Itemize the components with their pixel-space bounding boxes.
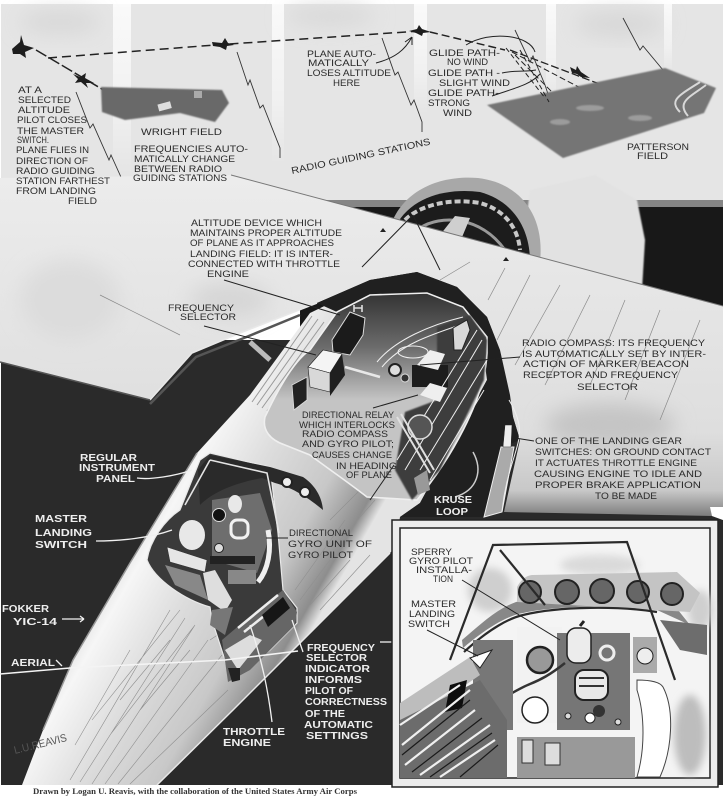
label: plane automatically loses altitude bbox=[307, 49, 391, 89]
altitude device box bbox=[332, 305, 365, 355]
engine cowling bbox=[392, 178, 541, 262]
label: Patterson Field bbox=[627, 142, 689, 162]
wiring shadow right bbox=[395, 315, 487, 500]
wires bbox=[377, 317, 487, 480]
pilot bbox=[165, 520, 233, 635]
label: frequency selector indicator: SELECTOR bbox=[306, 652, 367, 664]
label: regular instrument panel: INSTRUMENT bbox=[79, 462, 156, 474]
label: plane automatically loses altitude: HERE bbox=[333, 78, 360, 89]
label: at a selected altitude: PILOT CLOSES bbox=[17, 115, 87, 126]
label: Kruse loop bbox=[434, 494, 472, 518]
radio compass unit bbox=[389, 350, 448, 402]
cowl band bbox=[462, 596, 690, 648]
label: glide paths: GLIDE PATH- bbox=[428, 88, 499, 99]
label: frequencies automatically change: MATICALLY CHANGE bbox=[134, 154, 235, 165]
connecting rod bbox=[345, 367, 380, 377]
label: directional relay: IN HEADING bbox=[336, 461, 397, 472]
label: directional relay: AND GYRO PILOT; bbox=[302, 439, 394, 450]
label: at a selected altitude: SELECTED bbox=[18, 95, 71, 106]
label: regular instrument panel: REGULAR bbox=[80, 452, 137, 464]
label: plane automatically loses altitude: MATICALLY bbox=[308, 58, 370, 69]
label: glide paths: STRONG bbox=[428, 98, 470, 109]
inset label: master landing switch: LANDING bbox=[409, 609, 455, 620]
label: at a selected altitude: FROM LANDING bbox=[16, 186, 96, 197]
label: landing gear switches: PROPER BRAKE APPLICATION bbox=[535, 480, 701, 491]
label: glide paths: GLIDE PATH - bbox=[428, 68, 500, 79]
leader lines bbox=[204, 215, 534, 538]
label: at a selected altitude: FIELD bbox=[68, 196, 97, 207]
label: frequency selector indicator: SETTINGS bbox=[306, 730, 368, 742]
label: aerial: AERIAL bbox=[11, 657, 56, 669]
wing strut behind hatch bbox=[250, 342, 270, 360]
label: radio guiding stations: RADIO GUIDING STATIONS bbox=[290, 137, 432, 177]
label: throttle engine bbox=[223, 726, 285, 749]
dark background below wing bbox=[1, 340, 723, 785]
inset label: master landing switch: SWITCH bbox=[408, 619, 450, 630]
label: landing gear switches bbox=[534, 436, 711, 502]
lower gear and crossed bars bbox=[397, 414, 434, 495]
label: throttle engine: THROTTLE bbox=[223, 726, 285, 738]
label: directional gyro unit: GYRO UNIT OF bbox=[288, 539, 372, 550]
Kruse loop bbox=[455, 452, 478, 497]
label: directional gyro unit bbox=[288, 528, 372, 561]
inset label: Sperry gyro pilot installation: GYRO PILOT bbox=[409, 556, 473, 567]
dark hangar band behind engine bbox=[300, 200, 723, 340]
label: master landing switch: SWITCH bbox=[35, 539, 87, 551]
label: at a selected altitude bbox=[16, 85, 110, 207]
aerial wire bbox=[0, 651, 298, 674]
label: frequencies automatically change bbox=[133, 144, 248, 184]
label: directional relay: CAUSES CHANGE bbox=[312, 450, 392, 461]
caption: Drawn by Logan U. Reavis, with the collaboration of the United States Army Air Corps bbox=[33, 786, 358, 796]
hatching at right bbox=[660, 620, 707, 655]
radio beams zigzag bbox=[76, 18, 663, 186]
inset label: Sperry gyro pilot installation: SPERRY bbox=[411, 547, 453, 558]
throttle and selector indicator bbox=[222, 590, 297, 682]
label: glide paths: NO WIND bbox=[447, 57, 488, 68]
label: Fokker YIC-14 bbox=[2, 603, 57, 628]
label: frequency selector indicator: OF THE bbox=[305, 708, 345, 720]
label: radio compass bbox=[522, 338, 706, 393]
label: glide paths: GLIDE PATH- bbox=[429, 48, 500, 59]
instrument panel cowl bbox=[185, 455, 323, 533]
field: Wright Field bbox=[101, 87, 229, 122]
label: altitude device: LANDING FIELD: IT IS INTER- bbox=[190, 249, 333, 260]
label: frequency selector indicator: PILOT OF bbox=[305, 685, 354, 697]
label: landing gear switches: CAUSING ENGINE TO IDLE AND bbox=[534, 469, 702, 480]
label: altitude device: MAINTAINS PROPER ALTITUDE bbox=[190, 228, 342, 239]
forward cockpit bbox=[147, 453, 323, 682]
landing gear switch strut bbox=[484, 400, 520, 517]
label: directional gyro unit: GYRO PILOT bbox=[288, 550, 353, 561]
label: altitude device: CONNECTED WITH THROTTLE bbox=[188, 259, 340, 270]
label: directional relay: RADIO COMPASS bbox=[302, 429, 388, 440]
inset label: Sperry gyro pilot installation: TION bbox=[433, 574, 453, 585]
label: radio compass: ACTION OF MARKER BEACON bbox=[523, 359, 689, 370]
label: frequency selector indicator: INFORMS bbox=[305, 674, 362, 686]
inset leader lines bbox=[427, 580, 560, 656]
label: Patterson Field: PATTERSON bbox=[627, 142, 689, 153]
lower panel bbox=[517, 737, 635, 778]
label: at a selected altitude: AT A bbox=[18, 85, 43, 96]
label: glide paths: WIND bbox=[443, 108, 472, 119]
panel: sky with flight path bbox=[1, 4, 723, 204]
label: at a selected altitude: PLANE FLIES IN bbox=[16, 145, 89, 156]
gyro unit bbox=[477, 621, 621, 725]
label: at a selected altitude: RADIO GUIDING bbox=[16, 166, 95, 177]
label: directional relay: WHICH INTERLOCKS bbox=[299, 420, 395, 431]
label: Fokker YIC-14: FOKKER bbox=[2, 603, 49, 615]
inset: Sperry gyro pilot detail bbox=[392, 520, 718, 787]
label: at a selected altitude: ALTITUDE bbox=[18, 105, 70, 116]
frequency selector box bbox=[292, 350, 345, 410]
label: radio compass: RECEPTOR AND FREQUENCY bbox=[523, 370, 679, 381]
flight path dashes bbox=[36, 31, 610, 100]
label: Kruse loop: KRUSE bbox=[434, 494, 472, 506]
inset label: master landing switch: MASTER bbox=[411, 599, 456, 610]
main wing bbox=[0, 175, 723, 520]
arrow: altitude loss bbox=[376, 37, 412, 63]
instrument dial row bbox=[519, 579, 683, 605]
label: master landing switch: MASTER bbox=[35, 513, 87, 525]
label: frequency selector indicator: AUTOMATIC bbox=[304, 719, 373, 731]
label: frequency selector: FREQUENCY bbox=[168, 303, 235, 314]
label: directional gyro unit: DIRECTIONAL bbox=[289, 528, 353, 539]
label: landing gear switches: TO BE MADE bbox=[595, 491, 657, 502]
label: landing gear switches: ONE OF THE LANDING GEAR bbox=[535, 436, 682, 447]
label: directional relay bbox=[299, 410, 397, 481]
label: frequency selector indicator: FREQUENCY bbox=[307, 642, 375, 654]
label: altitude device bbox=[188, 218, 342, 280]
label: directional relay: OF PLANE bbox=[346, 470, 392, 481]
label: regular instrument panel: PANEL bbox=[96, 473, 136, 485]
label: frequencies automatically change: FREQUENCIES AUTO- bbox=[134, 144, 248, 155]
inset label: Sperry gyro pilot installation bbox=[409, 547, 473, 585]
upper relay box bbox=[453, 320, 470, 350]
windshield frame bbox=[450, 542, 675, 680]
label: frequency selector indicator bbox=[304, 642, 387, 742]
label: Kruse loop: LOOP bbox=[436, 506, 468, 518]
label: radio compass: RADIO COMPASS: ITS FREQUENCY bbox=[522, 338, 706, 349]
dark hull rim around hatch bbox=[317, 272, 520, 517]
white leader lines on dark areas bbox=[56, 470, 392, 722]
propeller disc bbox=[520, 175, 645, 290]
label: frequency selector indicator: INDICATOR bbox=[305, 663, 370, 675]
label: Patterson Field: FIELD bbox=[637, 151, 668, 162]
artist signature: L.U.REAVIS bbox=[13, 732, 68, 757]
label: frequencies automatically change: BETWEEN RADIO bbox=[134, 164, 222, 175]
label: Fokker YIC-14: YIC-14 bbox=[13, 616, 57, 628]
inset label: Sperry gyro pilot installation: INSTALLA- bbox=[416, 565, 472, 576]
label: at a selected altitude: DIRECTION OF bbox=[16, 156, 88, 167]
label: plane automatically loses altitude: PLANE AUTO- bbox=[307, 49, 376, 60]
cockpit opening bbox=[147, 453, 297, 680]
master switch and dark wiring bbox=[400, 640, 513, 778]
label: at a selected altitude: STATION FARTHEST bbox=[16, 176, 110, 187]
label: altitude device: ALTITUDE DEVICE WHICH bbox=[191, 218, 322, 229]
label: radio compass: IS AUTOMATICALLY SET BY INTER- bbox=[522, 349, 706, 360]
label: landing gear switches: SWITCHES: ON GROUND CONTACT bbox=[535, 447, 711, 458]
label: regular instrument panel bbox=[79, 452, 156, 485]
label: Wright Field: WRIGHT FIELD bbox=[141, 127, 222, 138]
label: frequency selector bbox=[168, 303, 236, 323]
label: master landing switch: LANDING bbox=[35, 527, 92, 539]
label: glide paths bbox=[428, 48, 510, 119]
fuselage bbox=[22, 290, 487, 785]
label: throttle engine: ENGINE bbox=[223, 737, 271, 749]
label: plane automatically loses altitude: LOSES ALTITUDE bbox=[307, 68, 391, 79]
label: master landing switch bbox=[35, 513, 92, 551]
planes bbox=[12, 25, 590, 88]
label: radio compass: SELECTOR bbox=[577, 382, 638, 393]
inset label: master landing switch bbox=[408, 599, 456, 630]
dash panel bbox=[517, 627, 671, 777]
label: altitude device: OF PLANE AS IT APPROACHES bbox=[190, 238, 334, 249]
field: Patterson Field bbox=[487, 68, 716, 158]
label: landing gear switches: IT ACTUATES THROTTLE ENGINE bbox=[535, 458, 697, 469]
label: directional relay: DIRECTIONAL RELAY bbox=[302, 410, 395, 421]
label: altitude device: ENGINE bbox=[207, 269, 249, 280]
label: glide paths: SLIGHT WIND bbox=[439, 78, 510, 89]
glide path lines bbox=[466, 36, 549, 102]
hatch opening with radio gear bbox=[264, 293, 487, 500]
label: frequency selector indicator: CORRECTNESS bbox=[305, 696, 387, 708]
dashboard bbox=[210, 493, 272, 584]
label: at a selected altitude: THE MASTER bbox=[17, 126, 84, 137]
label: at a selected altitude: SWITCH. bbox=[17, 135, 49, 146]
label: frequency selector: SELECTOR bbox=[180, 312, 236, 323]
label: frequencies automatically change: GUIDING STATIONS bbox=[133, 173, 227, 184]
